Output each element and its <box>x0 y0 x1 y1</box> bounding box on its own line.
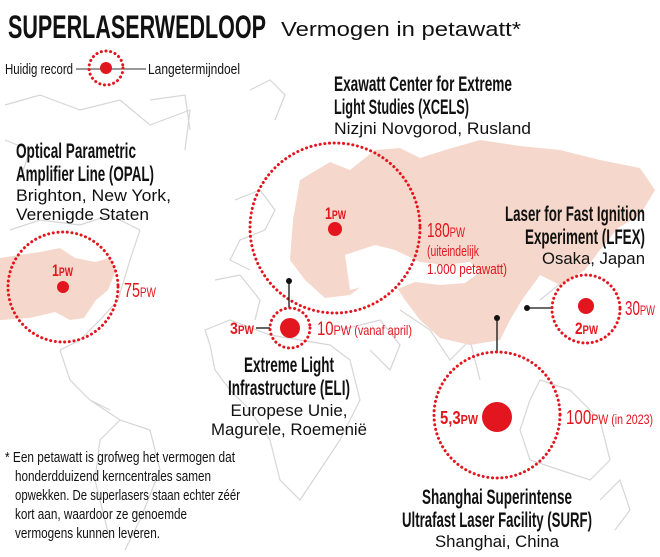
circle: ELI <box>230 278 412 348</box>
subtitle: Vermogen in petawatt* <box>281 19 521 41</box>
footnote: kort aan, waardoor ze genoemde <box>15 506 187 523</box>
legend <box>5 51 240 85</box>
label: OPAL <box>16 140 171 224</box>
circle: XCELS <box>250 143 507 313</box>
label: ELI: Infrastructure (ELI) <box>228 377 350 400</box>
circle: XCELS: 1PW <box>325 204 346 223</box>
footnote: vermogens kunnen leveren. <box>15 525 160 542</box>
label: OPAL: Brighton, New York, <box>16 186 171 205</box>
label: SURF: Shanghai, China <box>435 532 560 551</box>
circle: XCELS: 180PW <box>427 220 466 242</box>
label: XCELS: Light Studies (XCELS) <box>334 96 469 119</box>
circle: OPAL: 75PW <box>124 280 157 302</box>
label: LFEX: Osaka, Japan <box>542 249 645 268</box>
circle: LFEX <box>524 275 656 343</box>
label: SURF: Shanghai Superintense <box>422 486 572 509</box>
label: XCELS <box>334 73 531 138</box>
label: SURF <box>402 486 592 551</box>
circle: ELI: 10PW (vanaf april) <box>317 319 412 340</box>
label: ELI: Europese Unie, <box>230 401 348 420</box>
title: SUPERLASERWEDLOOP <box>8 9 266 45</box>
circle: OPAL <box>8 232 157 342</box>
label: XCELS: Nizjni Novgorod, Rusland <box>334 119 531 138</box>
label: OPAL: Optical Parametric <box>16 140 136 163</box>
footnote <box>5 449 240 542</box>
footnote: honderdduizend kerncentrales samen <box>15 468 211 485</box>
footnote: * Een petawatt is grofweg het vermogen dat <box>5 449 236 466</box>
footnote: opwekken. De superlasers staan echter zéér <box>15 487 240 504</box>
label: LFEX <box>505 203 645 268</box>
label: ELI: Magurele, Roemenië <box>211 420 367 439</box>
label: OPAL: Amplifier Line (OPAL) <box>16 163 154 186</box>
pink regions <box>0 248 116 320</box>
circle: OPAL: 1PW <box>52 261 73 280</box>
legend: Huidig record <box>5 61 73 78</box>
circle: XCELS: (uiteindelijk <box>427 243 479 260</box>
label: OPAL: Verenigde Staten <box>16 205 149 224</box>
label: ELI <box>211 354 367 439</box>
label: ELI: Extreme Light <box>244 354 334 377</box>
circle: LFEX: 2PW <box>575 319 599 338</box>
circle: SURF: 5,3PW <box>440 408 479 428</box>
circle: ELI: 3PW <box>230 319 255 338</box>
legend: Langetermijndoel <box>148 61 240 78</box>
circle: XCELS: 1.000 petawatt) <box>427 261 507 278</box>
label: XCELS: Exawatt Center for Extreme <box>334 73 512 96</box>
circle: SURF <box>434 315 653 478</box>
